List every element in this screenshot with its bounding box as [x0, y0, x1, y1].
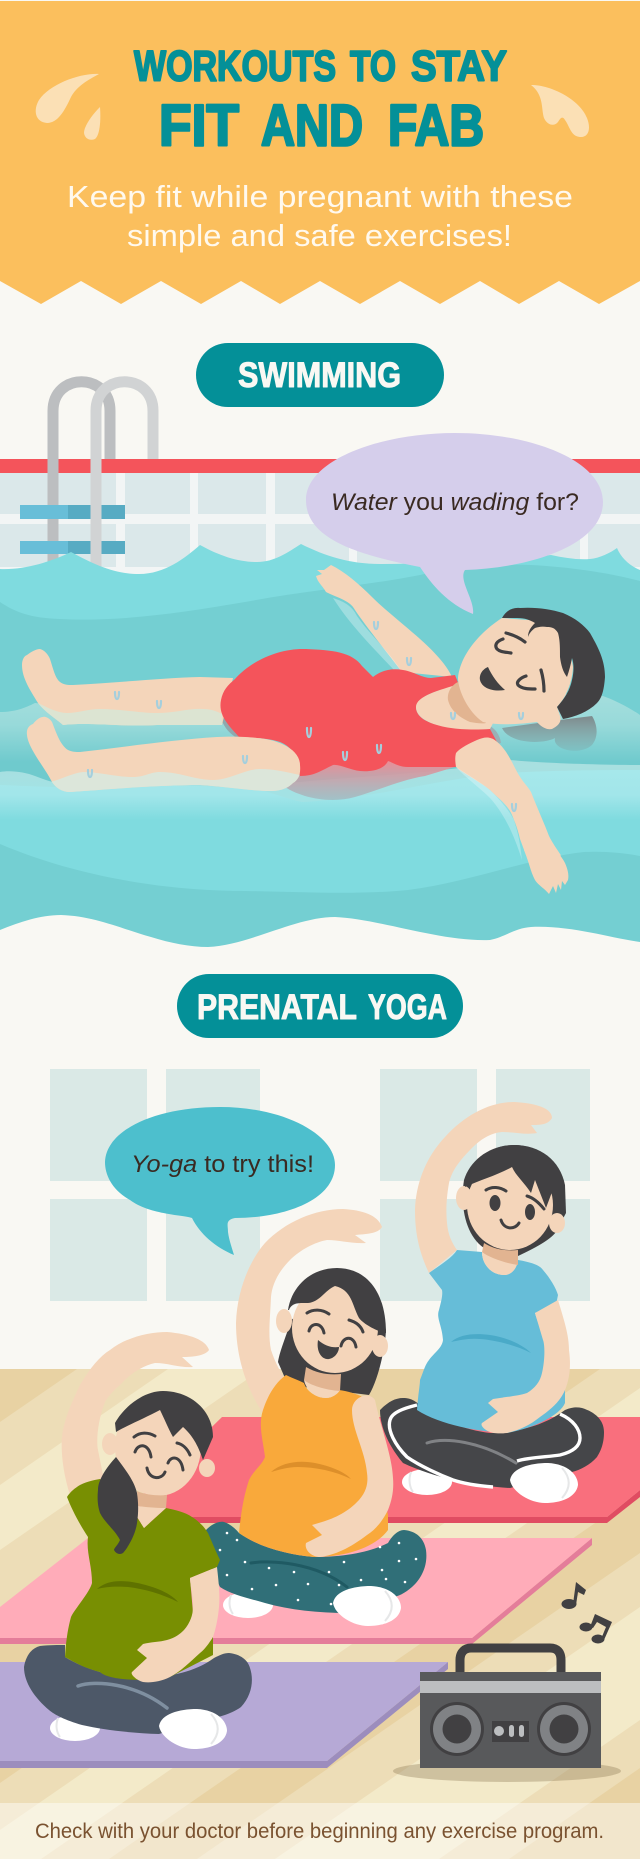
- neck: [304, 1367, 341, 1398]
- body: [420, 1672, 601, 1768]
- header banner: [0, 1, 640, 304]
- upper leg waterline: [38, 703, 222, 725]
- lower leg waterline: [52, 769, 300, 792]
- woman in orange: [206, 1209, 426, 1626]
- icon: right sweat drop: [531, 85, 589, 137]
- face: [458, 618, 573, 729]
- front foot: [159, 1709, 227, 1749]
- control panel: [492, 1721, 529, 1742]
- speech bubble: swimming: [306, 433, 603, 614]
- wooden floor: [0, 1369, 640, 1859]
- right speaker: [537, 1702, 591, 1756]
- ponytail: [98, 1457, 138, 1554]
- legs: [206, 1522, 426, 1613]
- footer note: [0, 1803, 640, 1859]
- title line 1: TO: [350, 42, 396, 90]
- leg crease: [427, 1440, 516, 1463]
- bottom wave edge: [0, 915, 640, 975]
- title line 1: WORKOUTS: [134, 42, 336, 90]
- studio windows: [50, 1069, 590, 1301]
- pool edge red bar: [0, 459, 640, 473]
- icon: music notes: [562, 1582, 612, 1644]
- pill heading: swimming: [196, 343, 444, 407]
- face features: [134, 1433, 190, 1478]
- title line 2: [159, 94, 484, 158]
- leg outline: [389, 1405, 580, 1487]
- neck shade: [448, 682, 486, 723]
- subtitle: simple and safe exercises!: [127, 218, 512, 253]
- face features: [307, 1310, 363, 1347]
- title line 2: AND: [261, 94, 363, 158]
- water drops on skin: [88, 622, 523, 811]
- bubble text: Yo-ga to try this!: [131, 1151, 314, 1178]
- right arm: [481, 1300, 570, 1433]
- face: [115, 1398, 201, 1496]
- bangs: [288, 1268, 386, 1333]
- handle: [460, 1648, 561, 1672]
- footer text: Check with your doctor before beginning any exercise program.: [35, 1820, 604, 1843]
- red mat: [120, 1417, 640, 1523]
- ears: [102, 1433, 215, 1477]
- stripe: [420, 1681, 601, 1693]
- title line 2: FIT: [159, 94, 239, 158]
- back foot: [50, 1715, 100, 1741]
- lower arm waterline: [456, 767, 522, 860]
- hair top: [115, 1391, 213, 1460]
- water front layer: [0, 770, 640, 860]
- belly crease: [451, 1334, 531, 1353]
- face features: [486, 1187, 544, 1228]
- belly crease: [271, 1462, 351, 1479]
- title line 2: FAB: [388, 94, 484, 158]
- front foot: [510, 1463, 578, 1503]
- ears: [276, 1309, 388, 1357]
- yoga mats: [0, 1417, 640, 1768]
- section: swimming: [0, 343, 640, 975]
- swimmer shadow: [220, 708, 597, 800]
- subtitle: Keep fit while pregnant with these: [67, 179, 573, 214]
- face: [292, 1283, 378, 1373]
- pink mat: [0, 1538, 592, 1644]
- woman in blue: [380, 1102, 604, 1503]
- green shirt: [65, 1479, 220, 1680]
- raised arm: [316, 565, 452, 677]
- leg crease: [78, 1683, 167, 1708]
- pill heading: yoga: [177, 974, 463, 1038]
- pill label: PRENATAL: [197, 988, 357, 1027]
- legs: [380, 1398, 604, 1488]
- lower leg: [27, 717, 300, 792]
- purple mat: [0, 1662, 448, 1768]
- chest: [416, 684, 505, 730]
- back foot: [402, 1469, 452, 1495]
- belly crease: [97, 1581, 178, 1602]
- title line 1: STAY: [411, 42, 507, 90]
- subtitle: [67, 179, 573, 253]
- water dark band: [0, 565, 640, 790]
- eyes: [496, 633, 544, 691]
- pool wall tiles: [0, 473, 640, 579]
- icon: left sweat drops: [36, 74, 100, 140]
- raised arm: [415, 1102, 552, 1273]
- water middle band: [0, 694, 640, 790]
- leg crease: [251, 1562, 347, 1587]
- pill label: SWIMMING: [238, 356, 401, 395]
- mouth: [318, 1340, 339, 1359]
- boombox shadow: [393, 1760, 621, 1782]
- pill label: YOGA: [368, 988, 447, 1027]
- right arm: [306, 1395, 393, 1557]
- right arm: [132, 1567, 219, 1682]
- swimmer: [22, 565, 605, 860]
- swimsuit: [220, 649, 497, 776]
- lower arm: [455, 738, 568, 894]
- back hair: [463, 1145, 566, 1256]
- speech bubble: yoga: [105, 1107, 335, 1255]
- pool ladder: [20, 382, 153, 580]
- neck: [482, 1243, 518, 1275]
- section: prenatal yoga: [0, 974, 640, 1859]
- woman in green: [24, 1332, 252, 1749]
- hair: [502, 608, 605, 719]
- water front light layer: [0, 760, 640, 810]
- raised arm: [62, 1332, 209, 1495]
- front foot: [333, 1586, 401, 1626]
- title line 1: [134, 42, 507, 90]
- upper leg: [22, 649, 233, 725]
- face: [467, 1160, 553, 1250]
- water lower dark band: [0, 844, 640, 950]
- pant dots: [219, 1532, 417, 1605]
- long hair back: [278, 1290, 386, 1395]
- blue shirt: [417, 1250, 565, 1433]
- swimmer hand over lower band: [524, 845, 568, 894]
- left speaker: [430, 1702, 484, 1756]
- boombox: [393, 1648, 621, 1782]
- fringe: [465, 1145, 565, 1215]
- bubble text: Water you wading for?: [331, 489, 579, 516]
- neck: [137, 1491, 167, 1528]
- raised arm waterline: [333, 598, 402, 672]
- legs: [24, 1645, 252, 1734]
- raised arm: [236, 1209, 382, 1412]
- water back layer: [0, 544, 640, 950]
- ears: [456, 1186, 565, 1233]
- back foot: [223, 1592, 273, 1618]
- banner zigzag shape: [0, 1, 640, 304]
- orange shirt: [239, 1375, 388, 1557]
- mouth: [480, 667, 505, 691]
